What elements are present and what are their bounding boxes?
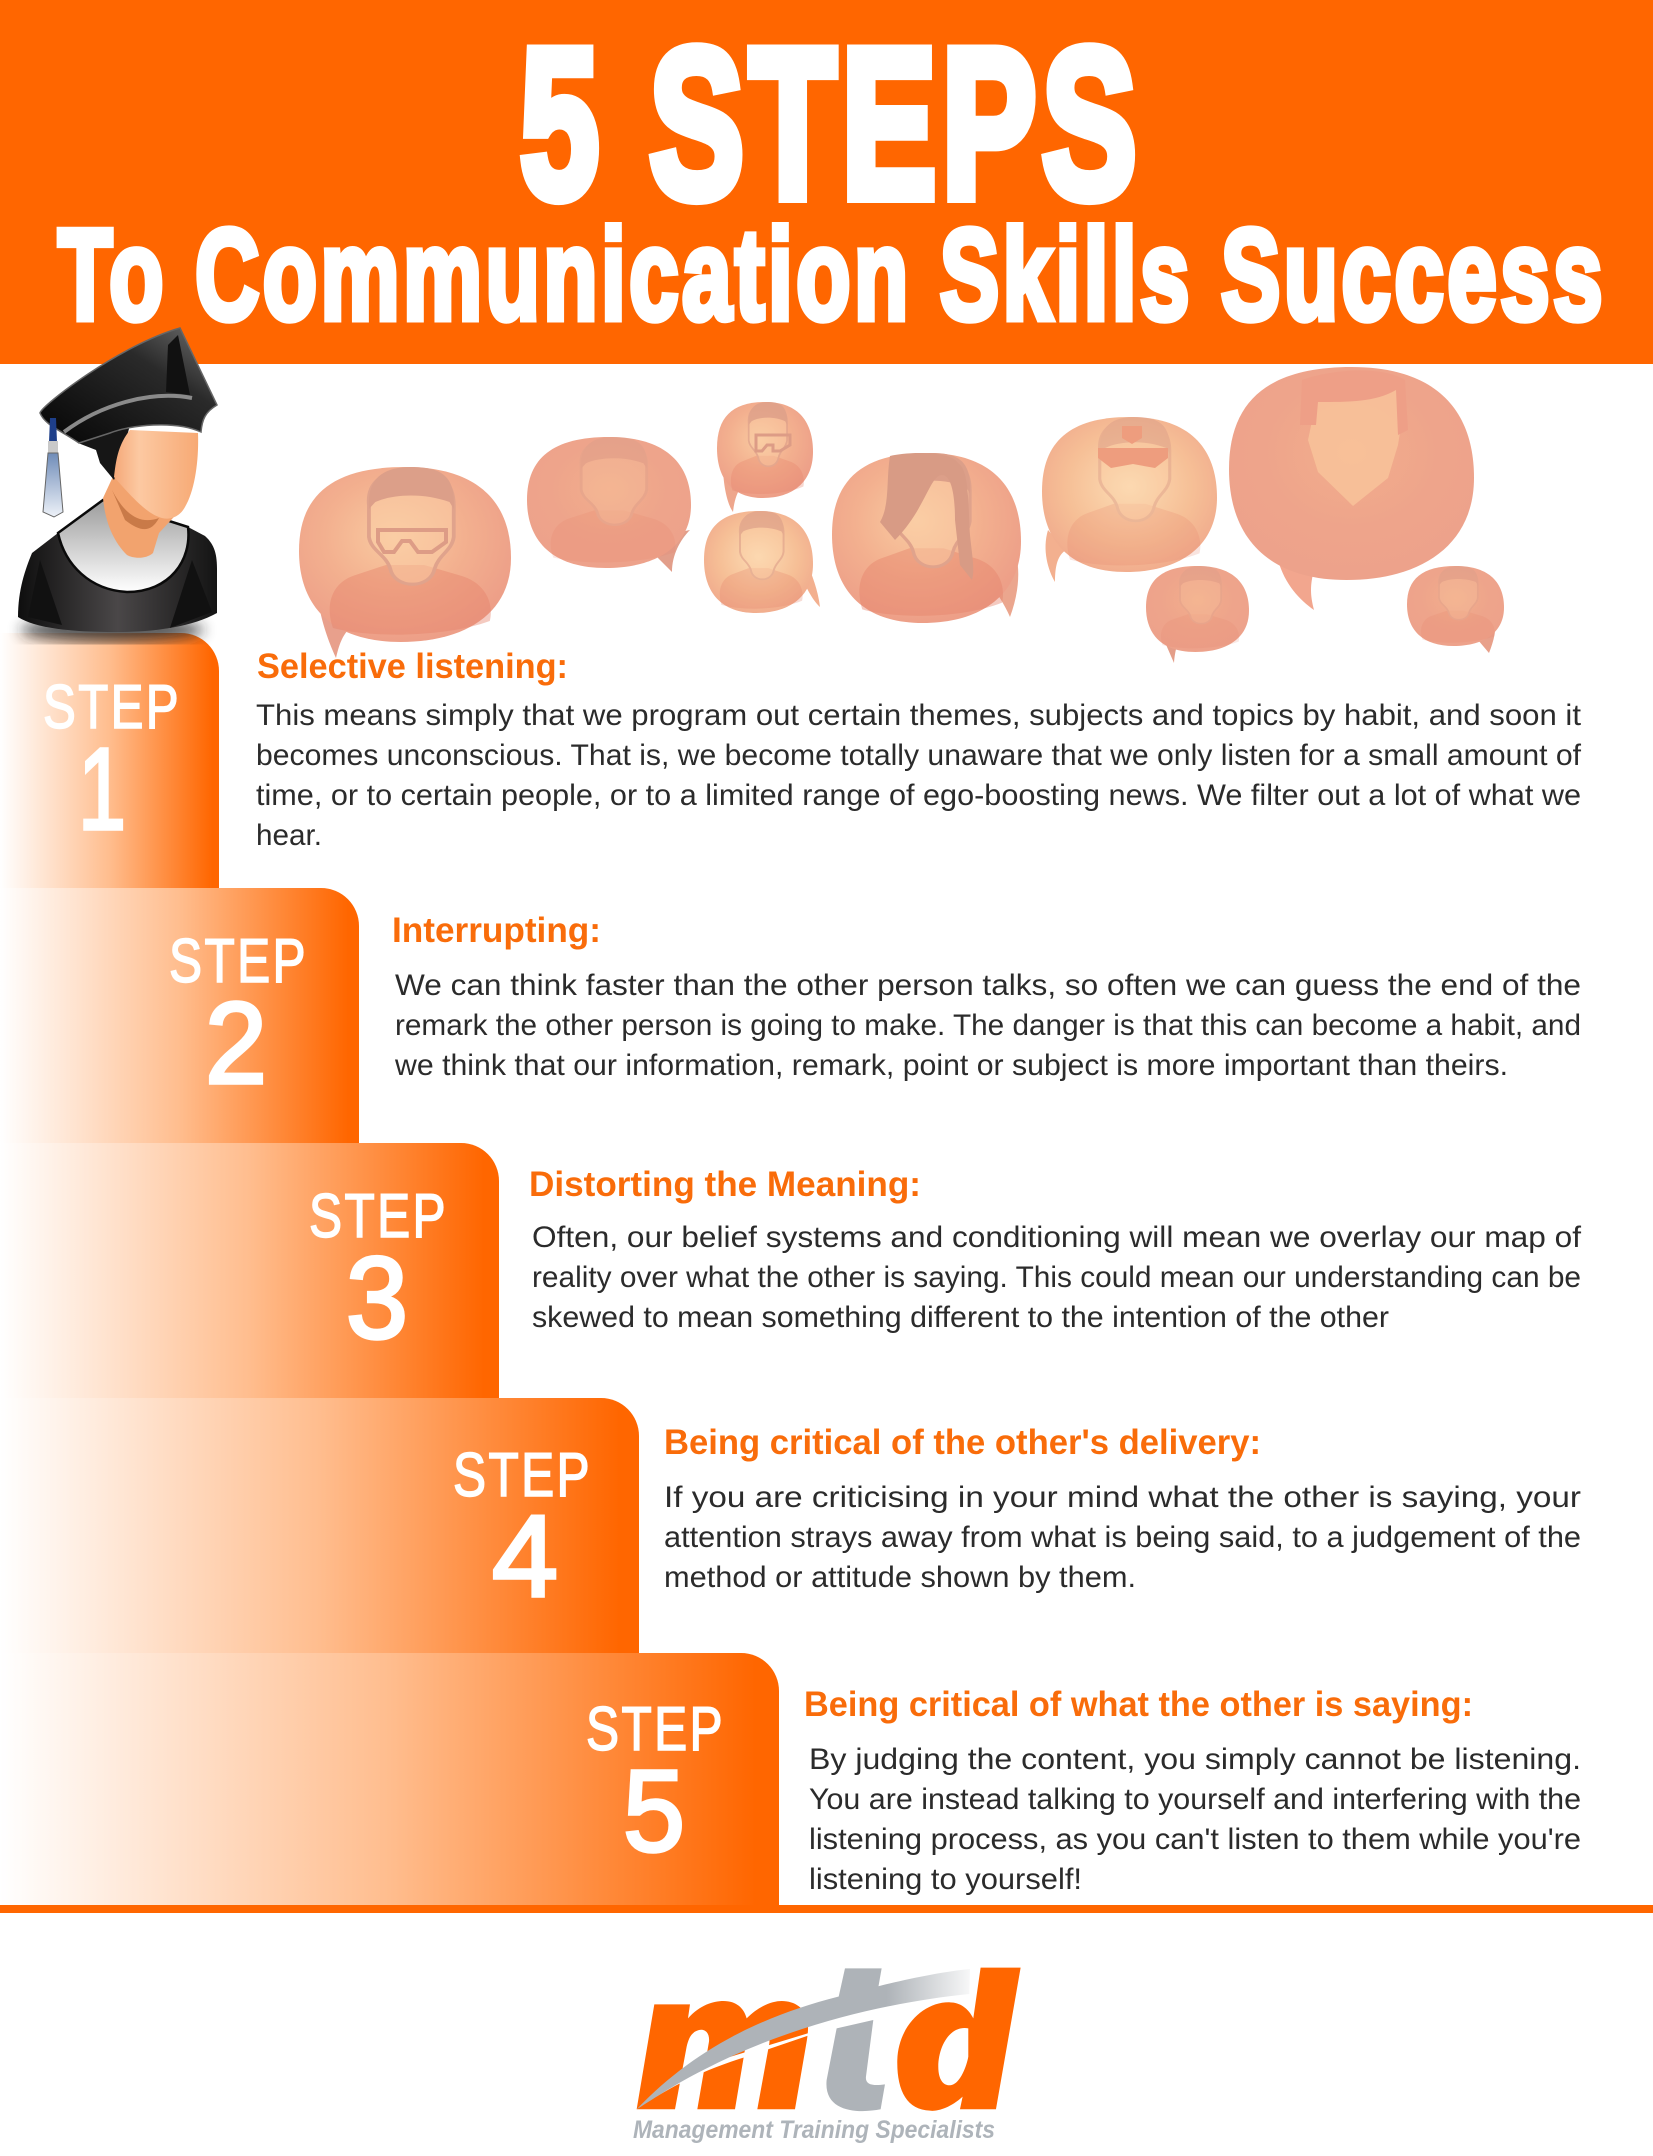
logo tagline: Management Training Specialists: [633, 2116, 995, 2144]
bubble 2: [527, 437, 691, 572]
paragraph: time, or to certain people, or to a limited range of ego-boosting news. We filter out a lot of what we: [256, 779, 1581, 812]
label: STEP 4: 4: [492, 1491, 558, 1621]
step 4 text: [664, 1423, 1581, 1594]
bubble 5: [832, 453, 1021, 623]
bubble 7: [1229, 367, 1474, 610]
step tab 2: [0, 888, 359, 1143]
label: STEP 3: STEP: [309, 1182, 448, 1251]
tassel: [43, 418, 63, 517]
step tab 5: [0, 1653, 779, 1906]
paragraph: method or attitude shown by them.: [664, 1561, 1136, 1594]
paragraph: You are instead talking to yourself and interfering with the: [809, 1783, 1581, 1816]
label: STEP 2: [169, 927, 308, 1108]
paragraph: This means simply that we program out certain themes, subjects and topics by habit, and soon it: [256, 699, 1582, 732]
title: 5 STEPS: 5 STEPS: [520, 5, 1142, 243]
paragraph: remark the other person is going to make. The danger is that this can become a habit, and: [395, 1009, 1581, 1042]
step tab 1: [0, 633, 219, 888]
bubble 6: [1042, 417, 1217, 582]
paragraph: [394, 969, 1581, 1082]
paragraph: [809, 1743, 1581, 1896]
paragraph: [256, 699, 1582, 852]
face: [114, 430, 198, 519]
robe: [18, 503, 217, 632]
paragraph: reality over what the other is saying. This could mean our understanding can be: [532, 1261, 1581, 1294]
step tab 3: [0, 1143, 499, 1398]
label: STEP 2: STEP: [169, 927, 308, 996]
paragraph: attention strays away from what is being said, to a judgement of the: [664, 1521, 1581, 1554]
heading: Being critical of what the other is saying:: [804, 1685, 1473, 1724]
label: STEP 1: STEP: [43, 673, 181, 742]
paragraph: listening process, as you can't listen to them while you're: [809, 1823, 1581, 1856]
logo mark: [637, 1968, 1021, 2111]
heading: Interrupting:: [392, 911, 601, 950]
paragraph: skewed to mean something different to the intention of the other: [532, 1301, 1389, 1334]
paragraph: we think that our information, remark, point or subject is more important than theirs.: [394, 1049, 1508, 1082]
heading: Distorting the Meaning:: [529, 1165, 921, 1204]
paragraph: [664, 1481, 1581, 1594]
paragraph: [532, 1221, 1582, 1334]
bubble 1: [299, 467, 511, 658]
header banner: [0, 0, 1653, 364]
label: STEP 3: 3: [346, 1233, 408, 1363]
speech bubbles with faded avatars: [299, 367, 1504, 663]
paragraph: By judging the content, you simply cannot be listening.: [809, 1743, 1581, 1776]
bubble 3: [717, 402, 813, 512]
label: STEP 5: 5: [623, 1746, 685, 1876]
paragraph: listening to yourself!: [809, 1863, 1082, 1896]
paragraph: If you are criticising in your mind what the other is saying, your: [664, 1481, 1581, 1514]
logo: mtd: [633, 1968, 1021, 2144]
neck: [103, 470, 185, 558]
step 2 text: [392, 911, 1581, 1082]
label: STEP 3: [309, 1182, 448, 1363]
hair: [78, 425, 130, 480]
paragraph: We can think faster than the other person talks, so often we can guess the end of the: [395, 969, 1581, 1002]
paragraph: becomes unconscious. That is, we become totally unaware that we only listen for a small amount of: [256, 739, 1582, 772]
step 3 text: [529, 1165, 1582, 1334]
cap: [40, 328, 217, 443]
label: STEP 4: STEP: [453, 1441, 592, 1510]
step 5 text: [804, 1685, 1581, 1896]
paragraph: Often, our belief systems and conditioning will mean we overlay our map of: [532, 1221, 1582, 1254]
label: STEP 5: STEP: [586, 1695, 725, 1764]
bottom orange rule: [0, 1905, 1653, 1913]
bubble 8: [1146, 566, 1249, 663]
label: STEP 5: [586, 1695, 725, 1876]
icon: graduate: [18, 328, 217, 642]
heading: Selective listening:: [257, 647, 568, 686]
bubble 9: [1407, 566, 1504, 653]
step tab 4: [0, 1398, 639, 1654]
label: STEP 2: 2: [205, 978, 267, 1108]
heading: Being critical of the other's delivery:: [664, 1423, 1261, 1462]
bubble 4: [704, 511, 820, 613]
collar: [58, 500, 188, 592]
label: STEP 1: 1: [78, 724, 126, 854]
paragraph: hear.: [256, 819, 322, 852]
step 1 text: [256, 647, 1582, 852]
label: STEP 4: [453, 1441, 592, 1621]
label: STEP 1: [43, 673, 181, 854]
